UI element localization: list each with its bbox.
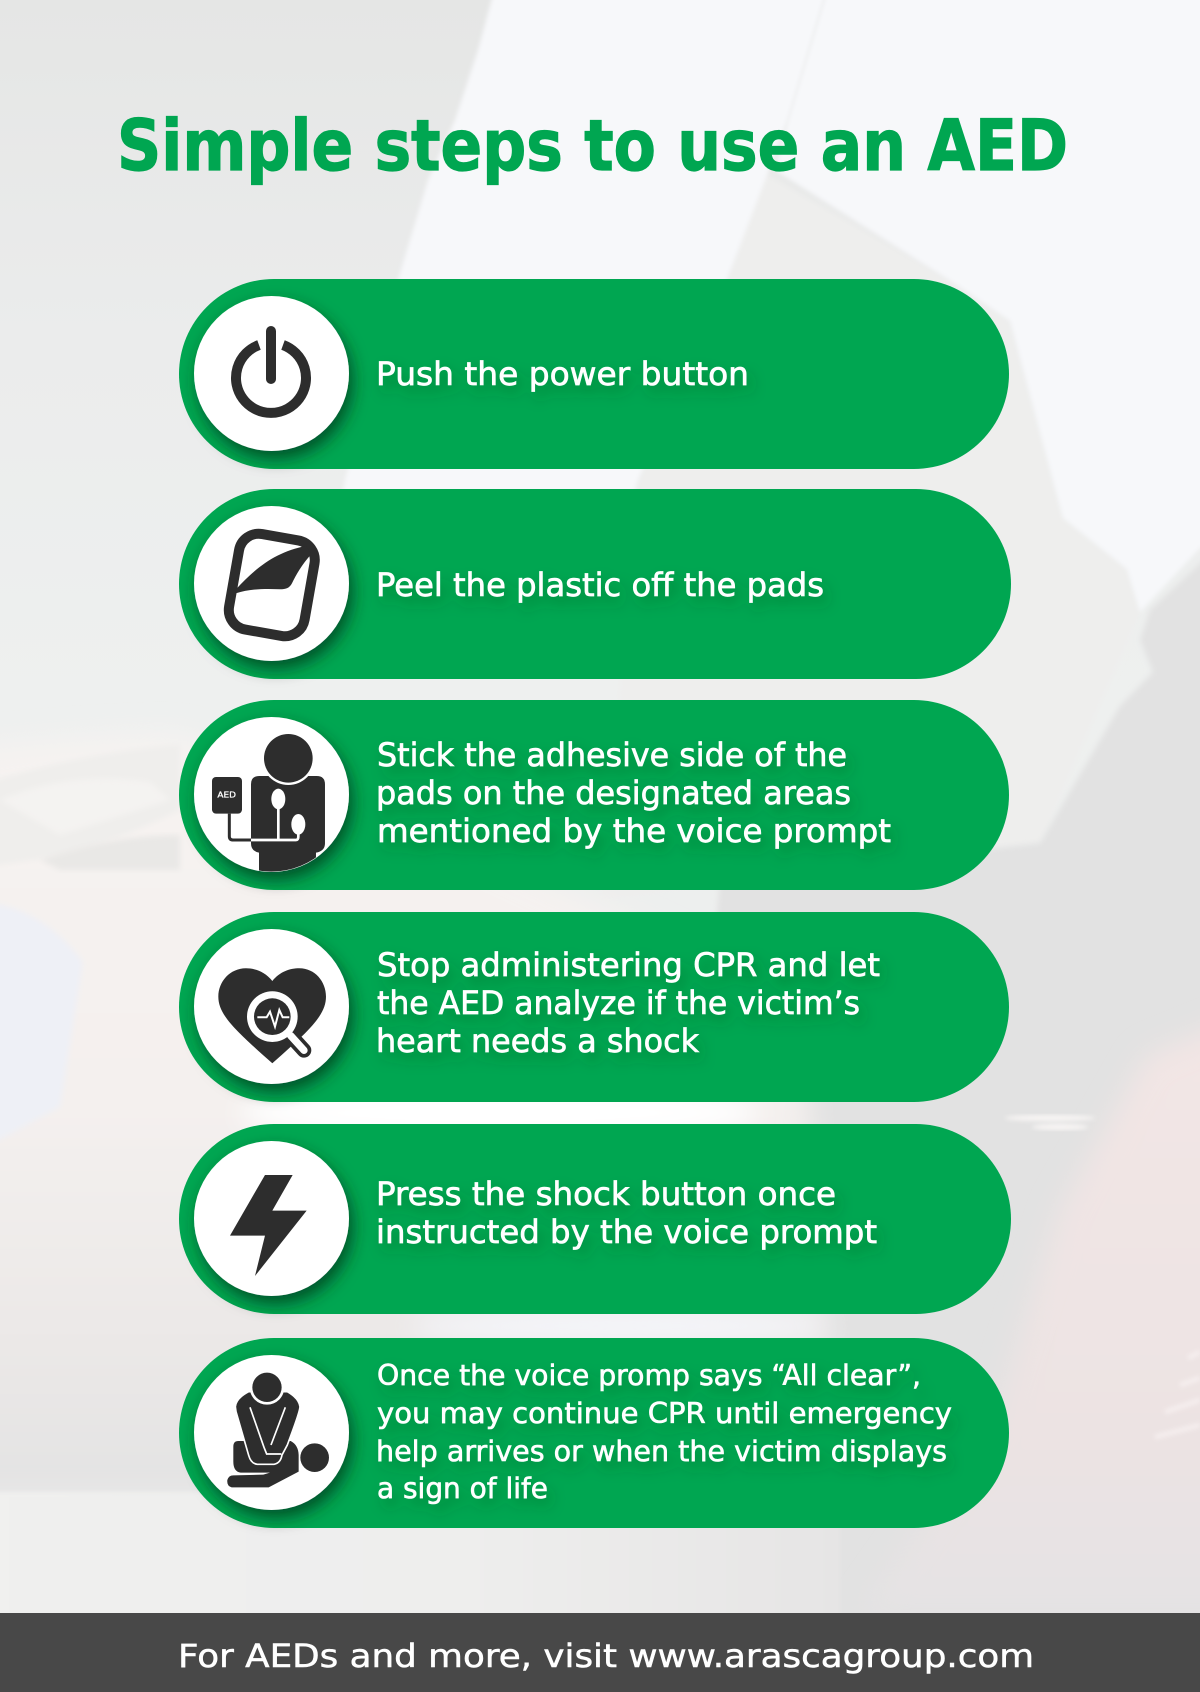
step 4 text: Stop administering CPR and let xyxy=(377,946,880,984)
step 6 text: help arrives or when the victim displays xyxy=(376,1435,947,1468)
panel: step 2 xyxy=(179,489,1011,679)
step 6 text: a sign of life xyxy=(377,1472,548,1505)
step 3 text: Stick the adhesive side of the xyxy=(377,736,847,774)
icon: lightning bolt xyxy=(230,1175,307,1276)
step 5 icon disc xyxy=(194,1141,349,1296)
step 3 text xyxy=(376,736,891,850)
footer text: For AEDs and more, visit www.arascagroup.com xyxy=(178,1637,1034,1675)
icon: peeling pad xyxy=(226,531,318,639)
step 6 text: you may continue CPR until emergency xyxy=(377,1397,952,1430)
panel: step 4 xyxy=(179,912,1009,1102)
step 1 text: Push the power button xyxy=(376,355,749,393)
step 4 text: the AED analyze if the victim’s xyxy=(377,984,860,1022)
icon: person performing CPR xyxy=(227,1370,329,1487)
footer bar xyxy=(0,1613,1200,1692)
icon: heart with magnifier xyxy=(218,968,326,1063)
step 3 text: mentioned by the voice prompt xyxy=(377,812,891,850)
step 6 text xyxy=(376,1359,952,1505)
title: Simple steps to use an AED xyxy=(117,105,1068,187)
step 4 text xyxy=(376,946,880,1060)
panel: step 1 xyxy=(179,279,1009,469)
step 5 text: instructed by the voice prompt xyxy=(376,1213,877,1251)
step 4 text: heart needs a shock xyxy=(376,1022,699,1060)
step 1 icon disc xyxy=(194,296,349,451)
step 4 icon disc xyxy=(194,929,349,1084)
icon: person with AED pads: AED xyxy=(217,789,236,799)
panel: step 5 xyxy=(179,1124,1011,1314)
step 6 icon disc xyxy=(194,1355,349,1510)
step 3 text: pads on the designated areas xyxy=(376,774,851,812)
step 3 icon disc xyxy=(194,717,349,872)
step 2 text: Peel the plastic off the pads xyxy=(376,566,824,604)
step 5 text xyxy=(376,1175,877,1251)
panel: step 3 xyxy=(179,700,1009,890)
panel: step 6 xyxy=(179,1338,1009,1528)
step 6 text: Once the voice promp says “All clear”, xyxy=(377,1359,921,1392)
icon: person with AED pads xyxy=(212,732,325,873)
icon: power button xyxy=(236,331,306,413)
step 5 text: Press the shock button once xyxy=(376,1175,836,1213)
step 2 icon disc xyxy=(194,506,349,661)
